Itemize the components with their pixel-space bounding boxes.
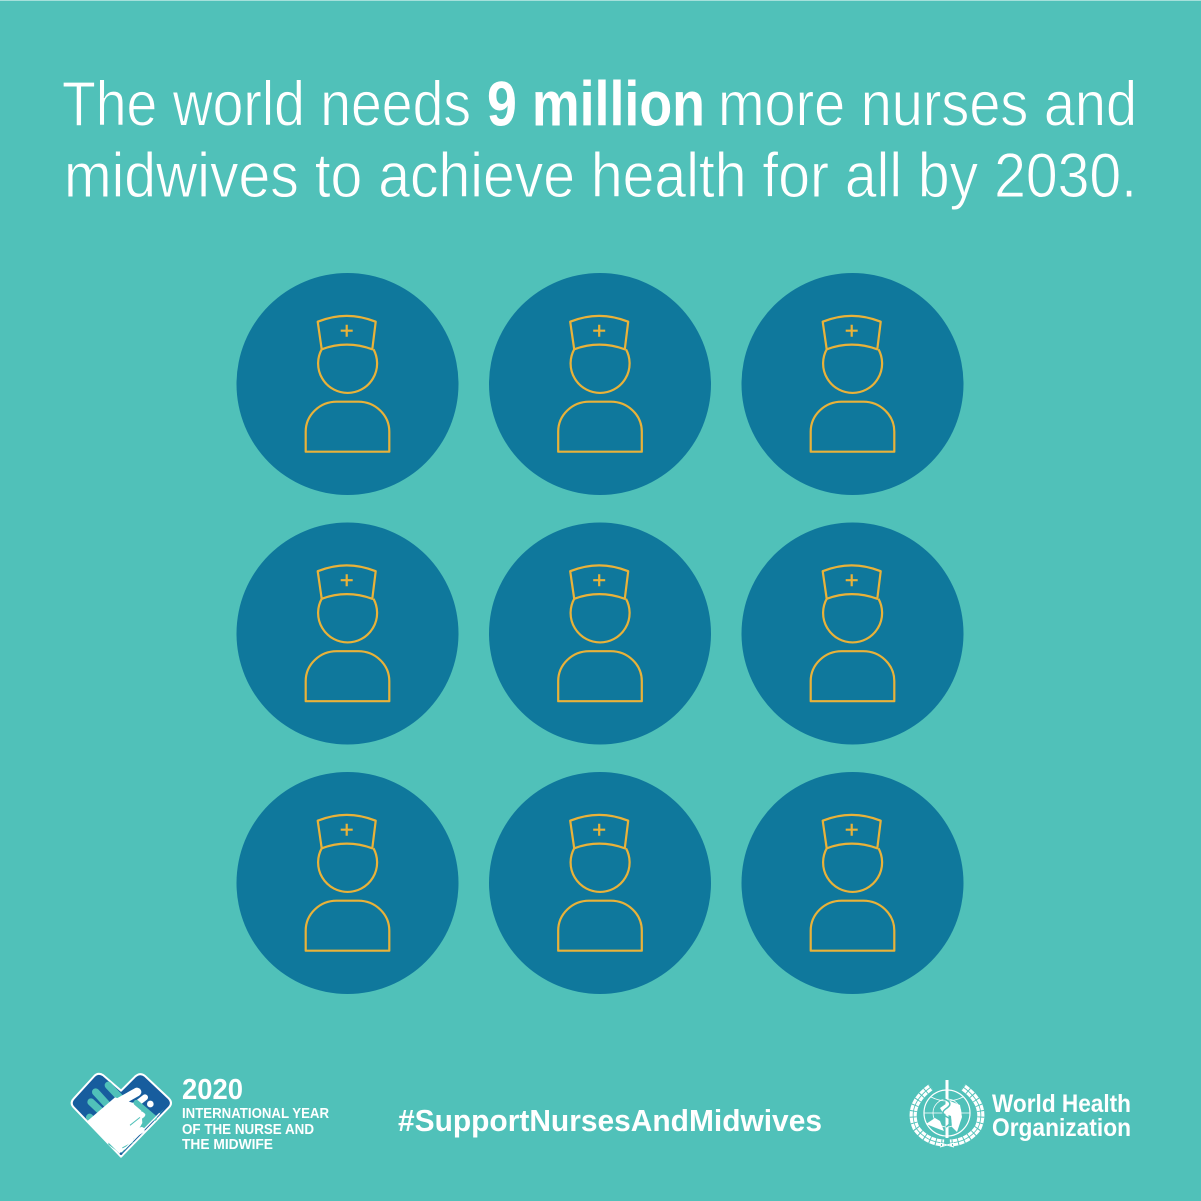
WHO wordmark: Organization xyxy=(992,1114,1131,1142)
hashtag: #SupportNursesAndMidwives xyxy=(398,1103,822,1138)
year of the nurse text: OF THE NURSE AND xyxy=(182,1122,314,1138)
nurse icon 3 xyxy=(742,273,964,495)
year of the nurse text: THE MIDWIFE xyxy=(182,1137,273,1153)
nurse grid xyxy=(236,273,964,994)
title: more nurses and xyxy=(718,70,1137,140)
nurse icon 1 xyxy=(236,273,458,495)
icon: heart and hands logo xyxy=(72,1074,171,1157)
nurse icon 7 xyxy=(236,772,458,994)
year of the nurse text: INTERNATIONAL YEAR xyxy=(182,1106,329,1122)
nurse icon 5 xyxy=(489,522,711,744)
year of the nurse text xyxy=(182,1074,329,1153)
nurse icon 6 xyxy=(742,522,964,744)
nurse icon 2 xyxy=(489,273,711,495)
WHO wordmark xyxy=(992,1090,1131,1142)
year of the nurse text: 2020 xyxy=(182,1074,243,1106)
title: 9 million xyxy=(487,70,705,140)
nurse icon 9 xyxy=(742,772,964,994)
nurse icon 4 xyxy=(236,522,458,744)
title: The world needs xyxy=(62,70,471,140)
WHO wordmark: World Health xyxy=(992,1090,1131,1118)
icon: WHO emblem xyxy=(913,1080,981,1147)
title xyxy=(62,70,1137,211)
nurse icon 8 xyxy=(489,772,711,994)
